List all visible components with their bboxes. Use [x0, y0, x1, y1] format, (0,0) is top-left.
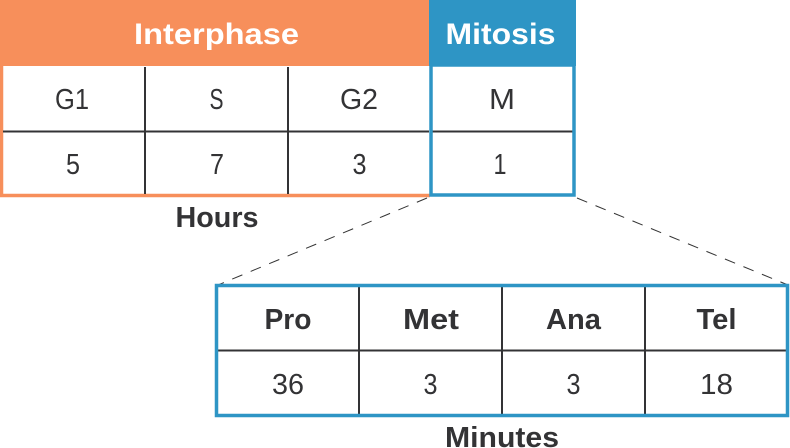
row: minutes values: 18 [700, 369, 733, 401]
row: hours values: 7 [210, 149, 224, 181]
row: stage labels: Ana [546, 304, 602, 336]
row: stage labels: Tel [696, 304, 736, 336]
interphase grid lines [3, 67, 429, 194]
heading: Mitosis: Mitosis [446, 18, 556, 51]
row: hours values [66, 149, 366, 181]
dashed connector left [218, 198, 427, 285]
mitosis outline [431, 65, 574, 195]
interphase outline [2, 66, 430, 196]
row: stage labels: Met [403, 304, 459, 336]
row: minutes values: 36 [272, 369, 304, 401]
row: phase labels: G1 [55, 84, 89, 116]
dashed connector right [577, 198, 788, 285]
row: phase labels: S [210, 84, 224, 116]
row: minutes values: 3 [424, 369, 438, 401]
row: stage labels: Pro [264, 304, 312, 336]
row: phase labels [55, 84, 378, 116]
stages grid lines [217, 286, 787, 415]
row: minutes values [272, 369, 733, 401]
mitosis header band [429, 0, 576, 66]
interphase header band [0, 0, 430, 66]
row: hours values: 3 [352, 149, 366, 181]
heading: Interphase: Interphase [134, 18, 299, 51]
label: M: M [489, 84, 515, 116]
panel: interphase table [0, 0, 430, 196]
value: 1: 1 [494, 149, 506, 181]
row: hours values: 5 [66, 149, 80, 181]
stages outline [216, 286, 788, 416]
panel: mitosis stages table [216, 286, 788, 416]
label: Hours: Hours [176, 202, 258, 234]
row: minutes values: 3 [566, 369, 580, 401]
row: phase labels: G2 [340, 84, 378, 116]
panel: mitosis table [429, 0, 576, 195]
row: stage labels [264, 304, 736, 336]
mitosis grid line [430, 130, 574, 132]
